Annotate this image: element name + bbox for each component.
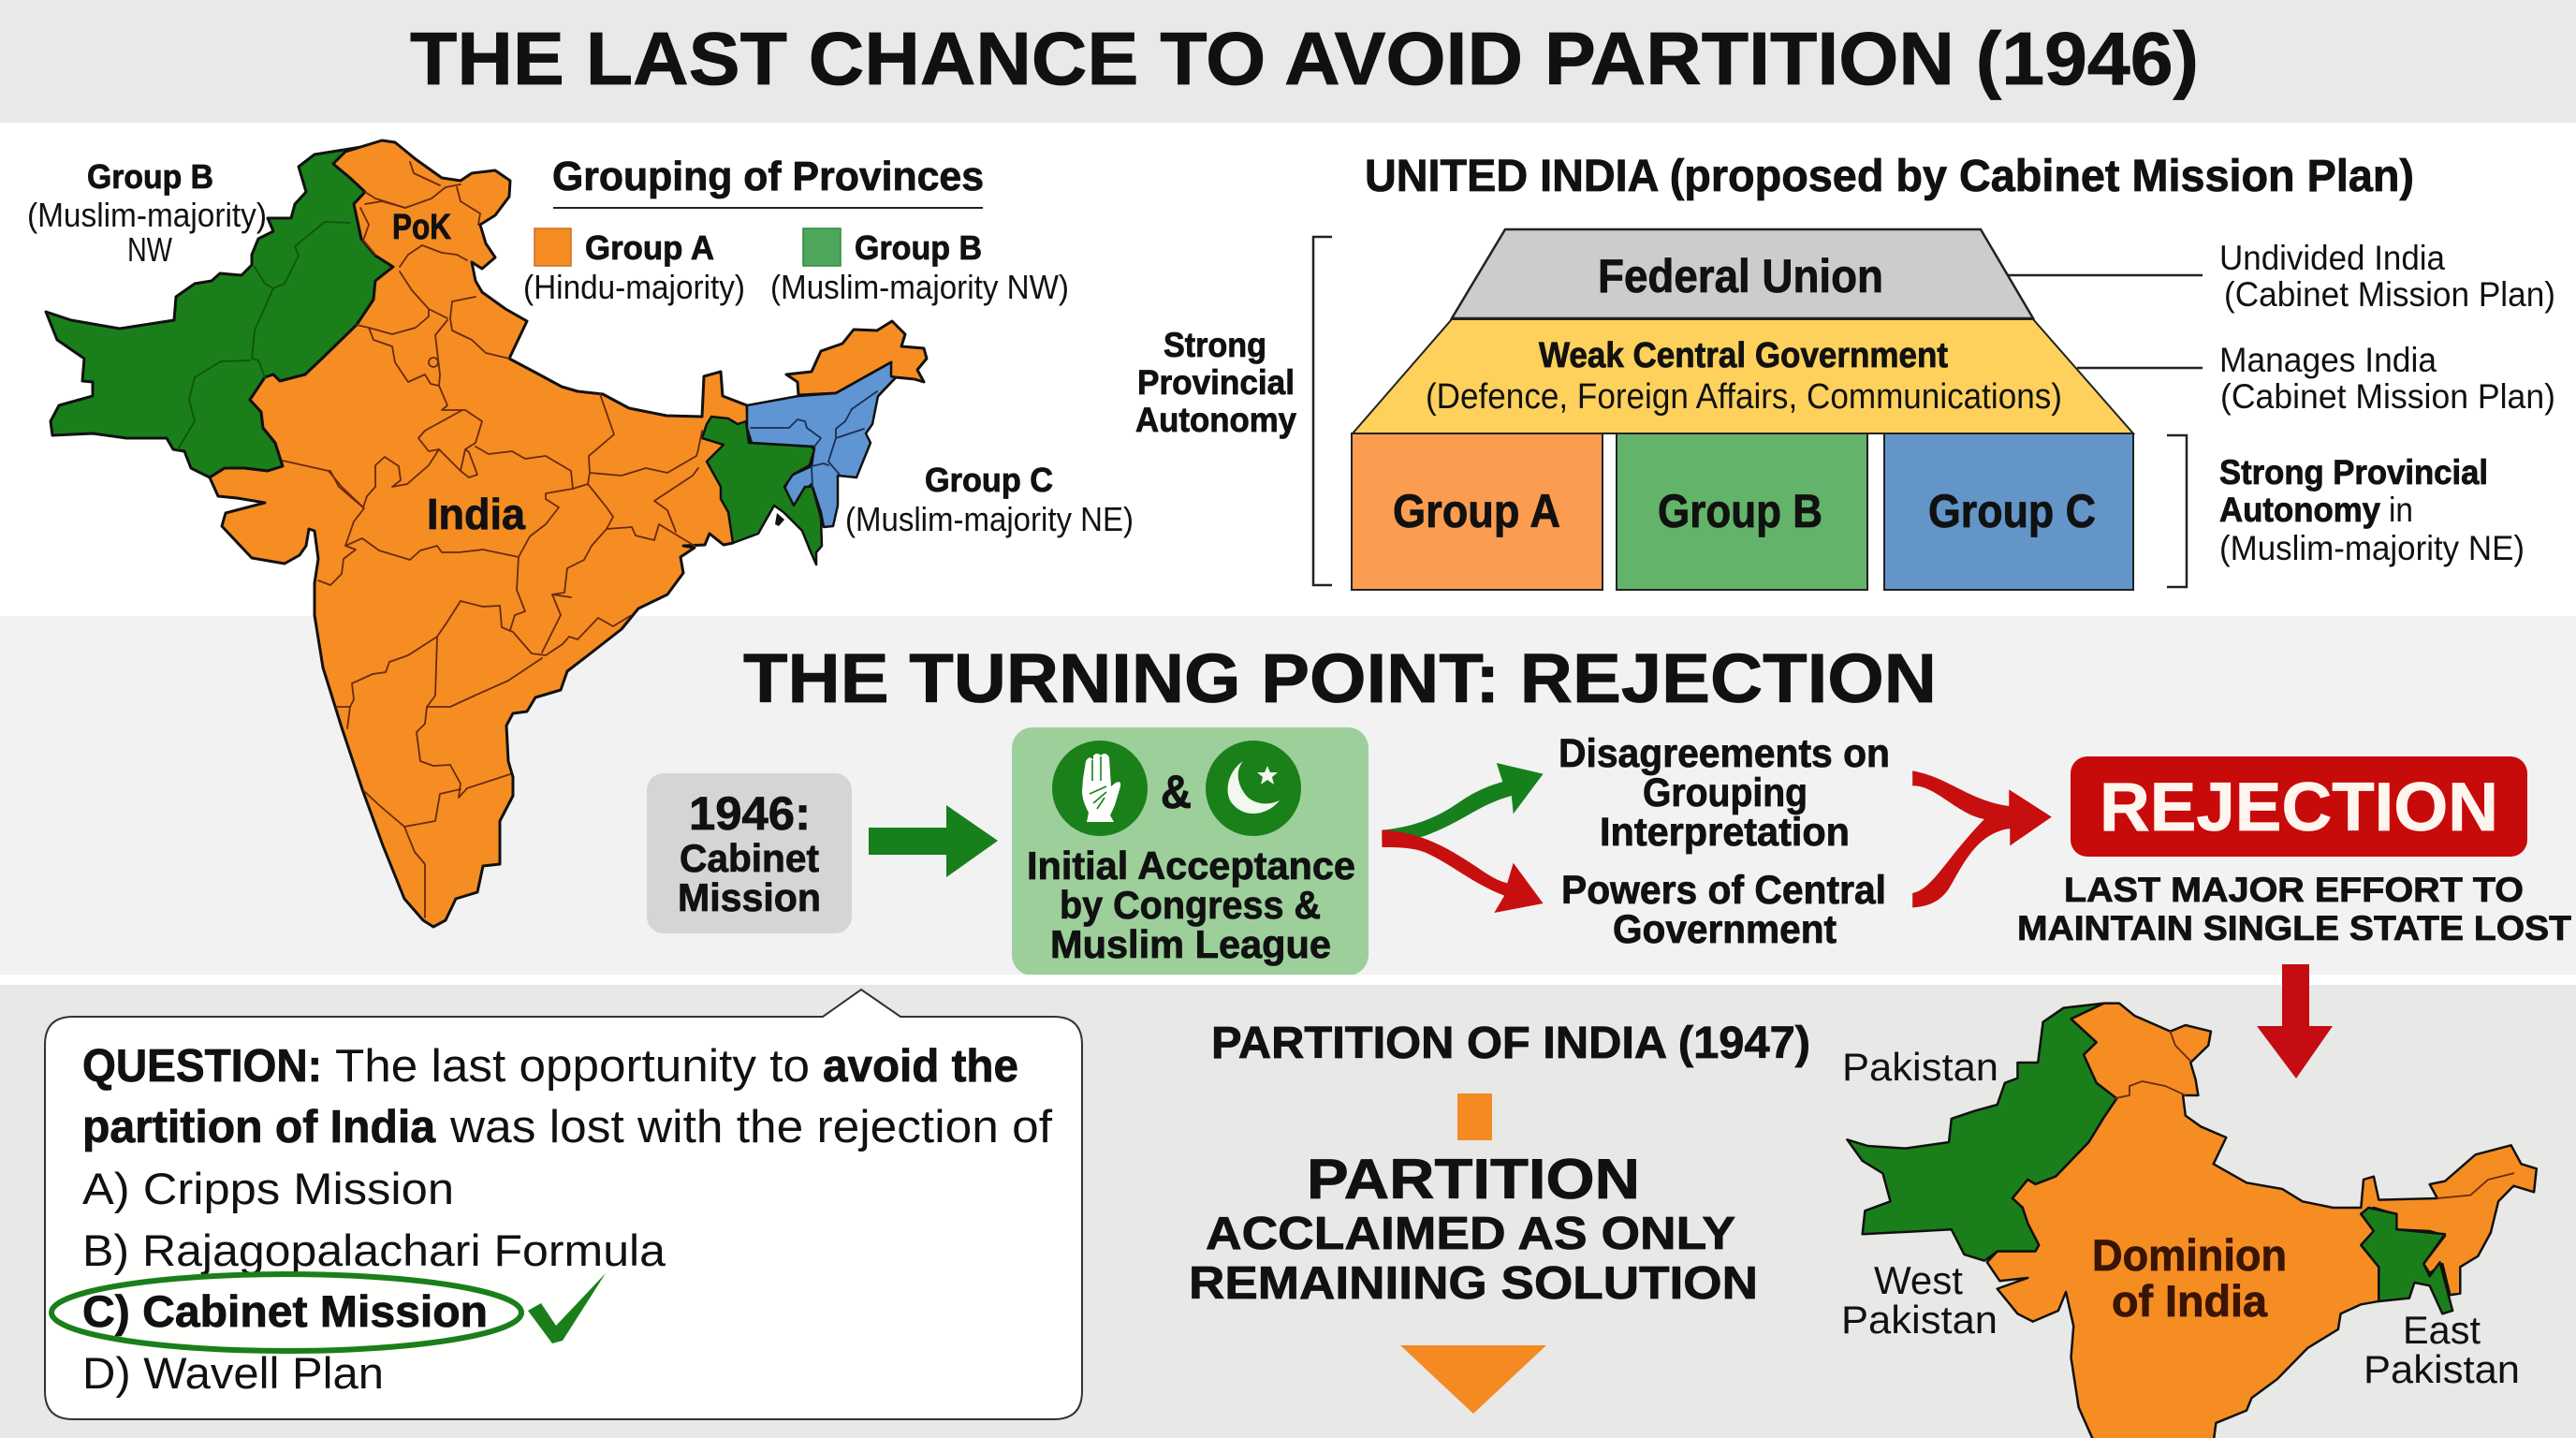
legend swatch: Group B: [803, 228, 841, 266]
option C correct answer: C) Cabinet Mission: [82, 1286, 488, 1336]
diagram: federal structure: [1352, 229, 2133, 590]
badge: REJECTION: [2071, 756, 2527, 857]
region: Group B north-west: [46, 147, 393, 477]
box: Group C: [1884, 433, 2133, 590]
question text: QUESTION:: [82, 1041, 322, 1092]
question text: was lost with the rejection of: [449, 1102, 1052, 1152]
region: Dominion of India: [1987, 1004, 2537, 1438]
map label: Group C: (Muslim-majority NE): [845, 500, 1134, 538]
map label: Group B north-west: [27, 157, 267, 269]
label: East Pakistan: Pakistan: [2364, 1347, 2520, 1391]
region: East Pakistan: [2361, 1208, 2452, 1313]
arrow: red branch: [1382, 830, 1544, 913]
option A: A) Cripps Mission: [82, 1164, 454, 1213]
white divider strip: [0, 975, 2576, 985]
acceptance text: Initial Acceptance: [1027, 844, 1355, 888]
annotation: Undivided India: Undivided India: [2219, 239, 2445, 277]
annotation: Manages India: [2077, 341, 2555, 416]
box: 1946 Cabinet Mission: 1946:: [689, 787, 811, 840]
legend note: Muslim-majority NW: (Muslim-majority NW): [770, 268, 1069, 306]
map label: India: India: [427, 490, 525, 538]
box: initial acceptance: [1012, 727, 1368, 976]
box: Group C: Group C: [1928, 485, 2096, 537]
box: 1946 Cabinet Mission: Mission: [678, 875, 821, 919]
issue: Grouping interpretation: Grouping: [1643, 770, 1808, 815]
issue: Powers of Central Government: Powers of Central: [1561, 868, 1886, 913]
annotation: Manages India: (Cabinet Mission Plan): [2220, 377, 2555, 416]
region: Group A Hindu-majority: [210, 140, 749, 927]
question text: partition of India: [82, 1102, 436, 1152]
map label: Group B north-west: Group B: [87, 157, 213, 196]
label: West Pakistan: West: [1874, 1258, 1963, 1302]
title band: [0, 0, 2576, 123]
acceptance text: Muslim League: [1050, 922, 1331, 966]
icon: check mark: [528, 1273, 606, 1343]
legend: grouping of provinces: [523, 154, 1069, 306]
legend heading: Grouping of Provinces: [552, 154, 984, 199]
legend item: Group B: Group B: [855, 228, 982, 267]
arrow: green branch: [1382, 763, 1544, 840]
annotation: Undivided India: (Cabinet Mission Plan): [2224, 275, 2555, 314]
map: partition of India: [1847, 1004, 2537, 1438]
caption: last major effort: LAST MAJOR EFFORT TO: [2064, 871, 2524, 909]
heading: United India: UNITED INDIA (proposed by Cabinet Mission Plan): [1365, 152, 2414, 201]
tier: Weak Central Government: Weak Central Government: [1539, 336, 1948, 375]
map label: Group C: Group C: [925, 461, 1053, 499]
arrow stem: orange: [1457, 1093, 1492, 1140]
annotation: Strong Provincial Autonomy: Autonomy: [2219, 491, 2380, 529]
map label: Group B north-west: (Muslim-majority): [27, 196, 267, 234]
issue: Grouping interpretation: [1559, 731, 1890, 855]
map label: Group C: [845, 461, 1134, 538]
heading: The Turning Point: THE TURNING POINT: REJECTION: [743, 639, 1937, 717]
annotation: Strong Provincial Autonomy: in: [2389, 491, 2413, 529]
issue: Powers of Central Government: Government: [1613, 907, 1837, 952]
map label: PoK: PoK: [392, 208, 451, 247]
tier: Weak Central Government: [1353, 319, 2133, 433]
region: West Pakistan: [1847, 1004, 2116, 1261]
box: Group B: Group B: [1658, 485, 1822, 537]
issue: Grouping interpretation: Disagreements on: [1559, 731, 1890, 776]
partition statement: [1189, 1148, 1758, 1309]
badge: REJECTION: REJECTION: [2100, 770, 2498, 845]
partition statement: PARTITION: [1307, 1148, 1640, 1211]
label: Dominion of India: Dominion: [2092, 1230, 2287, 1280]
region: Group B Bengal: [702, 417, 822, 565]
label: East Pakistan: [2364, 1308, 2520, 1391]
main title: THE LAST CHANCE TO AVOID PARTITION (1946): [410, 17, 2199, 100]
left label: Strong Provincial Autonomy: Autonomy: [1135, 401, 1296, 439]
question text: [82, 1041, 1052, 1152]
left label: Strong Provincial Autonomy: Provincial: [1137, 363, 1295, 402]
arrows: forked outcome: [1382, 763, 1544, 913]
heading: Partition of India 1947: PARTITION OF INDIA (1947): [1211, 1019, 1810, 1068]
acceptance text: by Congress &: [1060, 883, 1321, 927]
arrow: merge to rejection: [1912, 770, 2052, 907]
tier: Federal Union: [1452, 229, 2033, 318]
label: Pakistan: Pakistan: [1842, 1045, 1998, 1089]
map label: Group B north-west: NW: [127, 230, 172, 269]
partition map borders: [2115, 1032, 2513, 1198]
ampersand: &: [1161, 766, 1192, 818]
label: West Pakistan: Pakistan: [1841, 1298, 1998, 1342]
box: Group B: [1617, 433, 1867, 590]
label: East Pakistan: East: [2403, 1308, 2481, 1352]
provincial borders: [283, 162, 702, 917]
issue: Grouping interpretation: Interpretation: [1600, 810, 1850, 855]
region: Group C north-east: [747, 362, 896, 527]
legend swatch: Group A: [534, 228, 571, 266]
legend note: Hindu-majority: (Hindu-majority): [523, 268, 745, 306]
annotation: Manages India: Manages India: [2219, 341, 2437, 379]
box: Group A: Group A: [1393, 485, 1560, 537]
annotation: Undivided India: [2008, 239, 2555, 314]
option D: D) Wavell Plan: [82, 1348, 384, 1398]
annotation: Strong Provincial Autonomy: [2167, 435, 2525, 587]
arrow head: orange: [1400, 1345, 1546, 1414]
caption: last major effort: [2017, 871, 2571, 947]
label: Dominion of India: [2092, 1230, 2287, 1326]
partition statement: ACCLAIMED AS ONLY: [1206, 1209, 1735, 1259]
icon: Muslim League crescent: [1206, 741, 1301, 836]
question text: avoid the: [823, 1041, 1018, 1092]
left bracket: [1313, 237, 1332, 585]
tier: Weak Central Government: (Defence, Foreign Affairs, Communications): [1426, 377, 2062, 417]
left label: Strong Provincial Autonomy: [1135, 326, 1296, 439]
box: 1946 Cabinet Mission: Cabinet: [680, 836, 819, 880]
label: West Pakistan: [1841, 1258, 1998, 1342]
region: Group A north-east: [786, 321, 927, 396]
partition column: [1189, 1019, 1810, 1414]
arrow: rejection to partition map: [2257, 964, 2333, 1078]
question text: The last opportunity to: [335, 1041, 810, 1092]
legend item: Group A: Group A: [585, 228, 714, 267]
island: [775, 513, 784, 526]
answer ring: [51, 1274, 521, 1351]
arrow: to initial acceptance: [869, 805, 998, 877]
box: 1946 Cabinet Mission: [647, 773, 852, 933]
acceptance text: [1027, 844, 1355, 966]
tier: Federal Union: Federal Union: [1598, 250, 1883, 302]
left label: Strong Provincial Autonomy: Strong: [1164, 326, 1266, 364]
caption: last major effort: MAINTAIN SINGLE STATE LOST: [2017, 909, 2571, 947]
label: Dominion of India: of India: [2112, 1276, 2268, 1326]
issue: Powers of Central Government: [1561, 868, 1886, 952]
annotation: Strong Provincial Autonomy: (Muslim-majority NE): [2219, 529, 2525, 567]
box: Group A: [1352, 433, 1603, 590]
annotation: Strong Provincial Autonomy: Strong Provincial: [2219, 453, 2488, 492]
panel: question card: [45, 990, 1082, 1419]
option B: B) Rajagopalachari Formula: [82, 1225, 666, 1275]
partition statement: REMAINIING SOLUTION: [1189, 1258, 1758, 1309]
icon: Congress hand: [1052, 741, 1148, 836]
map: grouping of provinces: [46, 140, 927, 927]
